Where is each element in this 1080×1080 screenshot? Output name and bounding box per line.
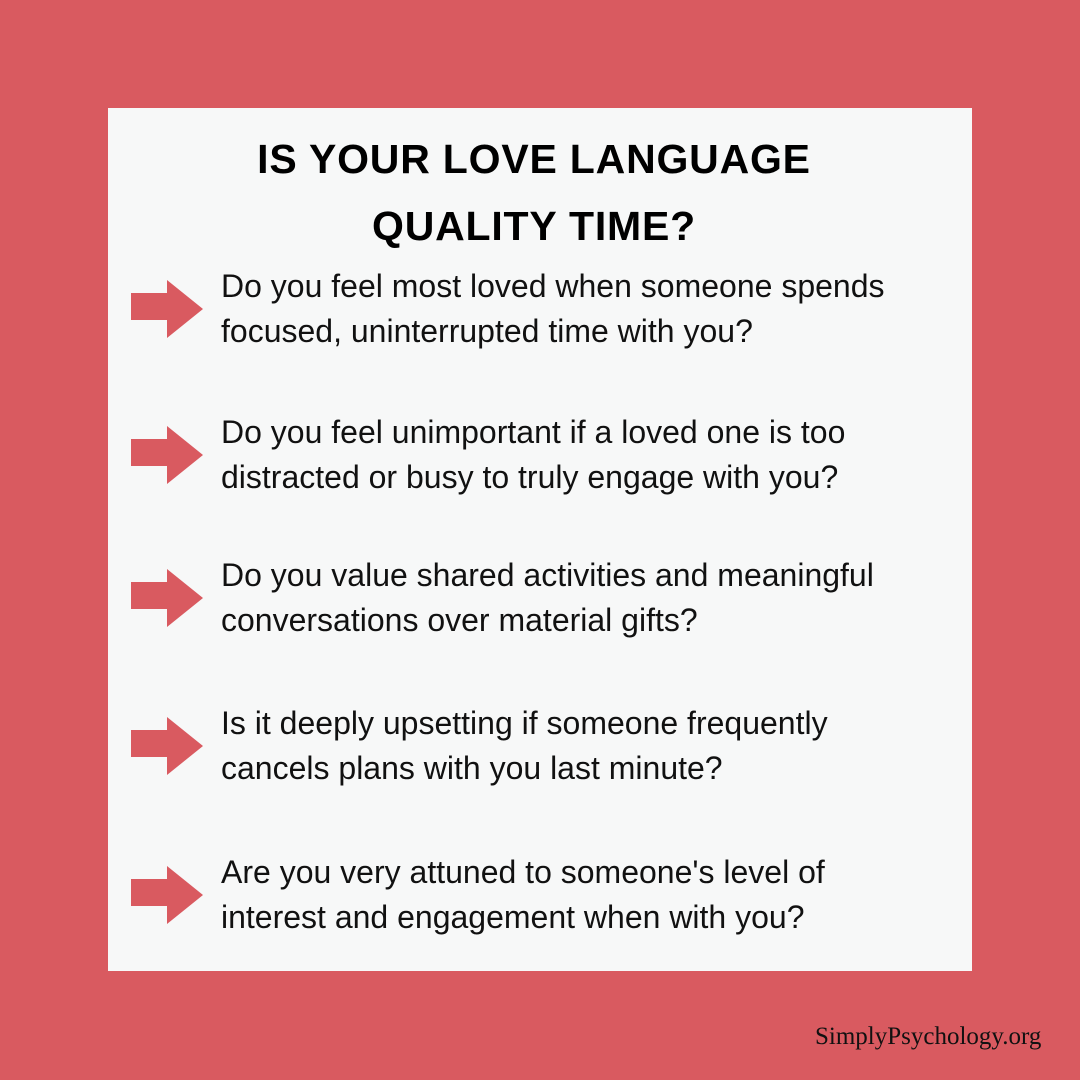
text 3: Do you value shared activities and meaningful (221, 557, 874, 593)
text 2: Do you feel unimportant if a loved one is too (221, 414, 845, 450)
text 3 (221, 557, 874, 638)
panel: white card (108, 108, 972, 971)
text 4: Is it deeply upsetting if someone frequently (221, 705, 828, 741)
title: IS YOUR LOVE LANGUAGE (257, 136, 811, 182)
icon: arrow (131, 569, 203, 627)
item 1 (131, 268, 884, 349)
title (257, 136, 811, 249)
title: QUALITY TIME? (372, 203, 696, 249)
text 2 (221, 414, 845, 495)
footer: source: SimplyPsychology.org (815, 1023, 1041, 1050)
item 5 (131, 854, 825, 935)
text 4 (221, 705, 828, 786)
text 5: Are you very attuned to someone's level of (221, 854, 825, 890)
item 3 (131, 557, 874, 638)
icon: arrow (131, 717, 203, 775)
text 3: conversations over material gifts? (221, 602, 698, 638)
icon: arrow (131, 426, 203, 484)
icon: arrow (131, 866, 203, 924)
text 1: focused, uninterrupted time with you? (221, 313, 753, 349)
item 4 (131, 705, 828, 786)
icon: arrow (131, 280, 203, 338)
text 4: cancels plans with you last minute? (221, 750, 723, 786)
text 1 (221, 268, 884, 349)
text 5 (221, 854, 825, 935)
text 2: distracted or busy to truly engage with you? (221, 459, 838, 495)
text 1: Do you feel most loved when someone spends (221, 268, 884, 304)
text 5: interest and engagement when with you? (221, 899, 804, 935)
item 2 (131, 414, 845, 495)
